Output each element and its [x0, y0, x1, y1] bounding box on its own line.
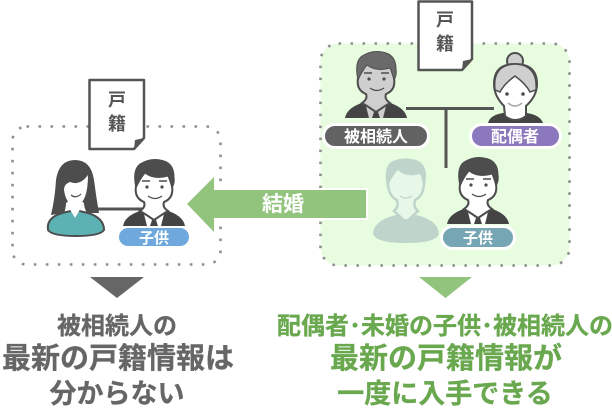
label: deceased	[324, 124, 428, 148]
text: right conclusion: 配偶者･未婚の子供･被相続人の	[277, 313, 612, 340]
label: spouse	[470, 124, 560, 148]
text: left conclusion: 被相続人の	[57, 313, 177, 340]
text: left conclusion: 最新の戸籍情報は	[2, 342, 234, 375]
arrow: marriage	[184, 173, 368, 235]
icon: spouse elderly woman	[488, 53, 543, 123]
text: left conclusion	[2, 313, 234, 408]
panel: left dotted box	[12, 126, 220, 264]
icon: deceased parent man	[345, 52, 407, 118]
label: left child	[119, 228, 189, 247]
icon: left child man	[123, 160, 185, 226]
arrow: left result triangle	[90, 277, 144, 298]
icon: right family register document	[418, 2, 472, 70]
text: right conclusion: 最新の戸籍情報が	[330, 341, 562, 375]
label: left child: 子供	[139, 230, 169, 247]
icon: right family register document: 籍	[436, 34, 454, 54]
label: unmarried child	[442, 226, 514, 248]
icon: right family register document: 戸	[436, 10, 454, 30]
arrow: marriage: 結婚	[262, 193, 304, 216]
text: right conclusion	[277, 313, 612, 408]
connector: left couple line	[98, 208, 146, 210]
panel: right green dotted box	[320, 44, 570, 266]
icon: left family register document: 籍	[108, 114, 126, 134]
icon: unmarried child man	[447, 158, 509, 224]
label: deceased: 被相続人	[344, 128, 408, 146]
arrow: right result triangle	[419, 277, 472, 298]
label: unmarried child: 子供	[463, 230, 493, 247]
label: spouse: 配偶者	[491, 128, 539, 146]
icon: left family register document: 戸	[108, 90, 126, 110]
icon: left family register document	[90, 80, 144, 149]
connector: right family tree lines	[406, 108, 494, 168]
icon: married child ghost	[373, 158, 439, 243]
icon: woman	[48, 160, 104, 236]
